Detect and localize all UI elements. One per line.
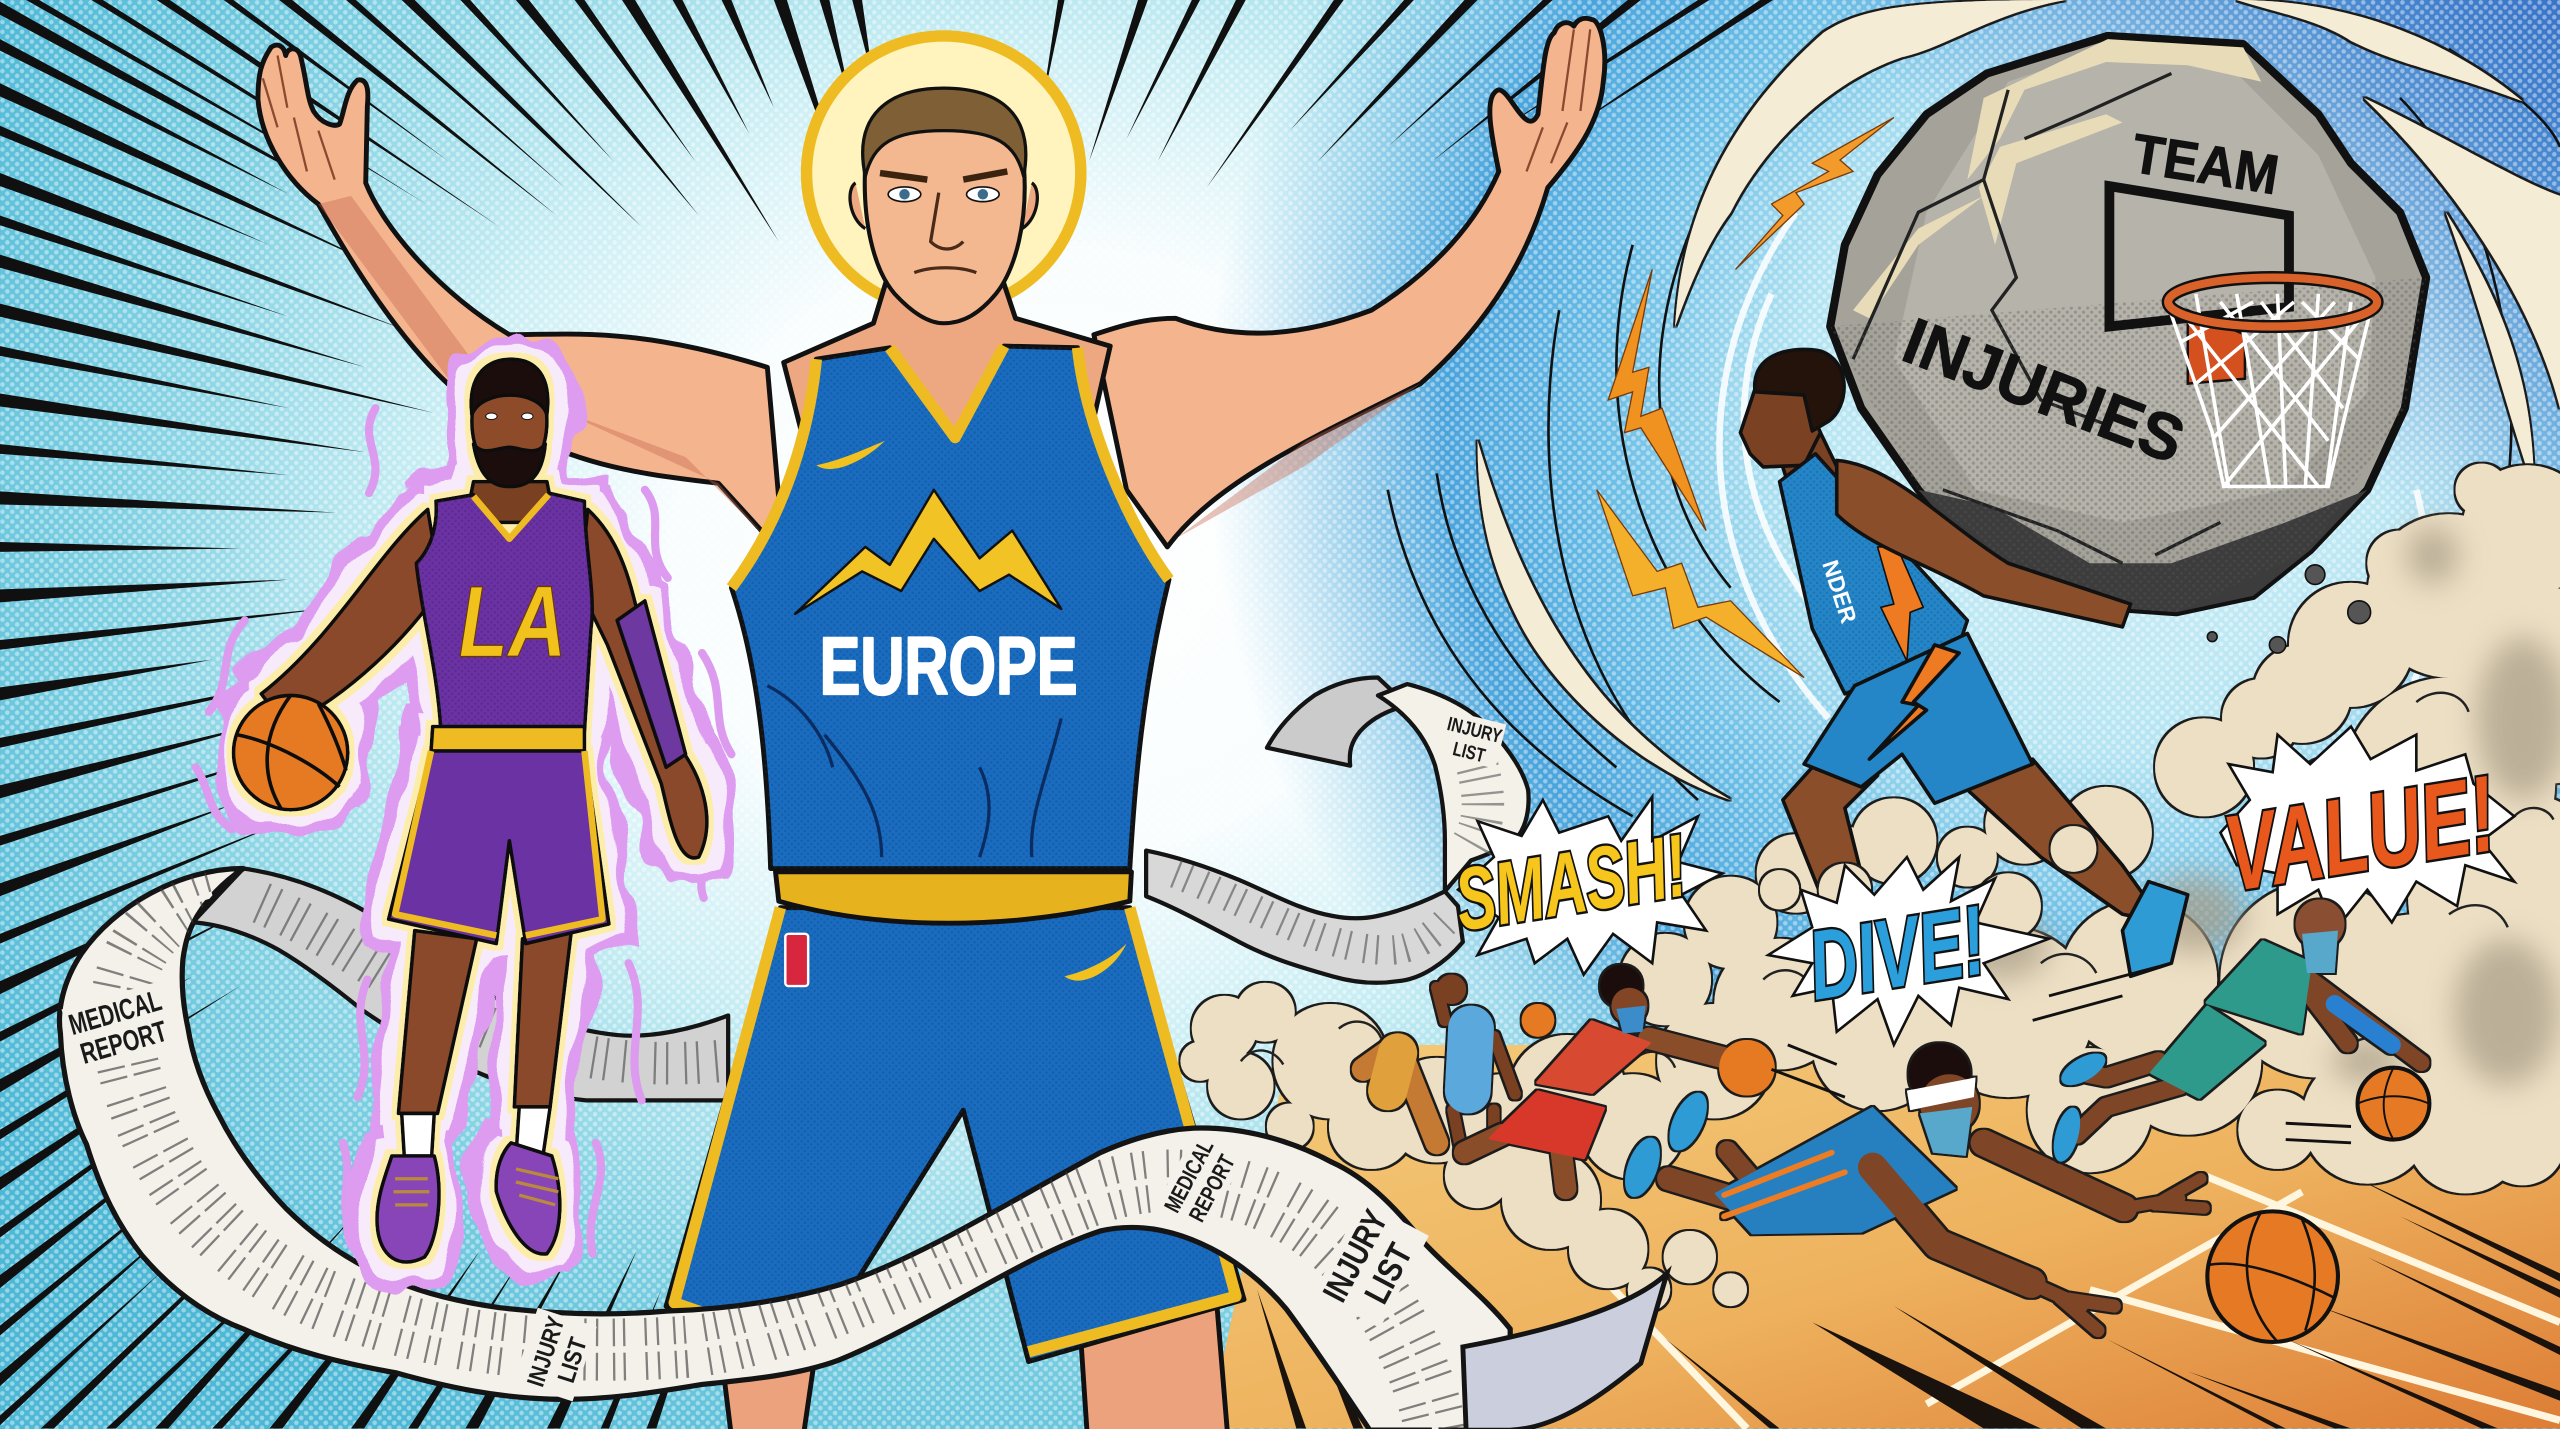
label: injury list, right: INJURY [1316,1204,1396,1308]
swirling wind streaks [1478,0,2560,800]
diver uniform [1714,1107,1956,1234]
word: dive: DIVE! [1801,884,1992,1021]
arm sleeve [617,601,686,767]
label: medical report, left: MEDICAL [65,984,165,1042]
shorts [666,872,1244,1362]
player legs [398,931,477,1113]
dust detail lines [1241,693,2553,1113]
burst: value [2217,726,2514,931]
sneakers [377,1156,439,1262]
distant players [1363,975,1554,1151]
player shorts [389,751,609,944]
carrier head [1740,349,1844,467]
center player [258,18,1605,1429]
league badge [785,934,808,986]
speed lines [0,0,1773,1429]
left player [233,359,707,1262]
label: injury list, right [1314,1201,1430,1329]
rock text: team: TEAM [2128,122,2283,206]
ribbon end curl [1463,1273,1667,1429]
waistband [776,872,1131,923]
aura flames [196,408,731,1254]
green player [2049,900,2421,1164]
arm shading [318,196,1420,539]
dust clouds behind [1180,464,2560,1311]
LA logo: LA [459,565,567,678]
carrier shoe [2122,882,2188,976]
dust shading [1951,526,2560,1086]
label: injury list, lower [514,1308,598,1402]
large floor ball [2207,1211,2338,1342]
dust clouds front [1760,826,2096,939]
legs [718,1298,1228,1429]
green player ball [2358,1068,2429,1140]
word: smash: SMASH! [1449,815,1693,950]
label: injury list, curl [1438,710,1506,770]
ribbon: back of left loop [193,869,728,1100]
carrier jersey [1780,454,1967,694]
burst: dive [1768,857,2049,1045]
label: medical report, left: REPORT [77,1015,171,1071]
jersey swoosh [816,441,885,469]
label: injury list, lower: LIST [553,1334,593,1386]
socks [402,1113,434,1167]
jersey [731,346,1169,869]
player waistband [431,726,584,751]
face [850,88,1037,323]
diver legs [1669,1179,1739,1200]
carrier back leg [1943,759,2163,922]
arms and shoulders [258,45,784,555]
carrier front leg [1783,767,1878,906]
player arms [261,509,441,726]
red player ball [1719,1040,1775,1095]
vortex strokes [1388,49,2560,816]
player head [465,482,555,522]
ribbon labels [62,710,1506,1402]
diver arms [1984,1143,2124,1208]
front ribbon [59,869,1510,1429]
halo [807,36,1081,310]
lightning bolts [1597,118,1894,678]
label: medical report, center: MEDICAL [1159,1135,1219,1217]
label: medical report, left [62,982,178,1075]
jersey text: EUROPE [820,621,1078,712]
neck and chest [784,269,1110,490]
court floor [1208,1045,2560,1429]
diver head [1909,1043,1971,1105]
carrier jersey text: NDER [1817,557,1862,627]
carrier arm [1837,460,2131,627]
backboard [2109,186,2289,327]
label: injury list, lower: INJURY [523,1313,570,1390]
shorts swoosh [1064,944,1127,981]
motion lines [1771,963,2351,1143]
label: injury list, right: LIST [1358,1237,1420,1310]
ribbon: far curl [1146,678,1529,983]
hoop and net [2168,278,2377,487]
label: injury list, curl: LIST [1450,738,1487,767]
red player [1464,965,1775,1189]
player jersey [416,493,592,731]
carrier shorts [1804,633,2033,803]
jersey folds [767,686,1061,857]
diving player [1618,1043,2204,1331]
diver shoes [1618,1133,1667,1201]
palm lines [263,29,1590,180]
mountain logo [795,490,1061,614]
player carrying boulder [1740,349,2188,976]
boulder [1830,36,2426,653]
player basketball [233,695,348,810]
burst: smash [1449,797,1722,975]
basketballs [2207,1068,2429,1342]
label: injury list, curl: INJURY [1445,713,1504,748]
carrier jersey bolt [1878,547,1923,661]
carrier neck [1780,433,1842,498]
label: medical report, center [1156,1131,1244,1232]
small ball [1522,1004,1554,1037]
label: medical report, center: REPORT [1183,1150,1240,1226]
rock text: injuries: INJURIES [1894,304,2194,477]
rock debris [2207,565,2371,653]
